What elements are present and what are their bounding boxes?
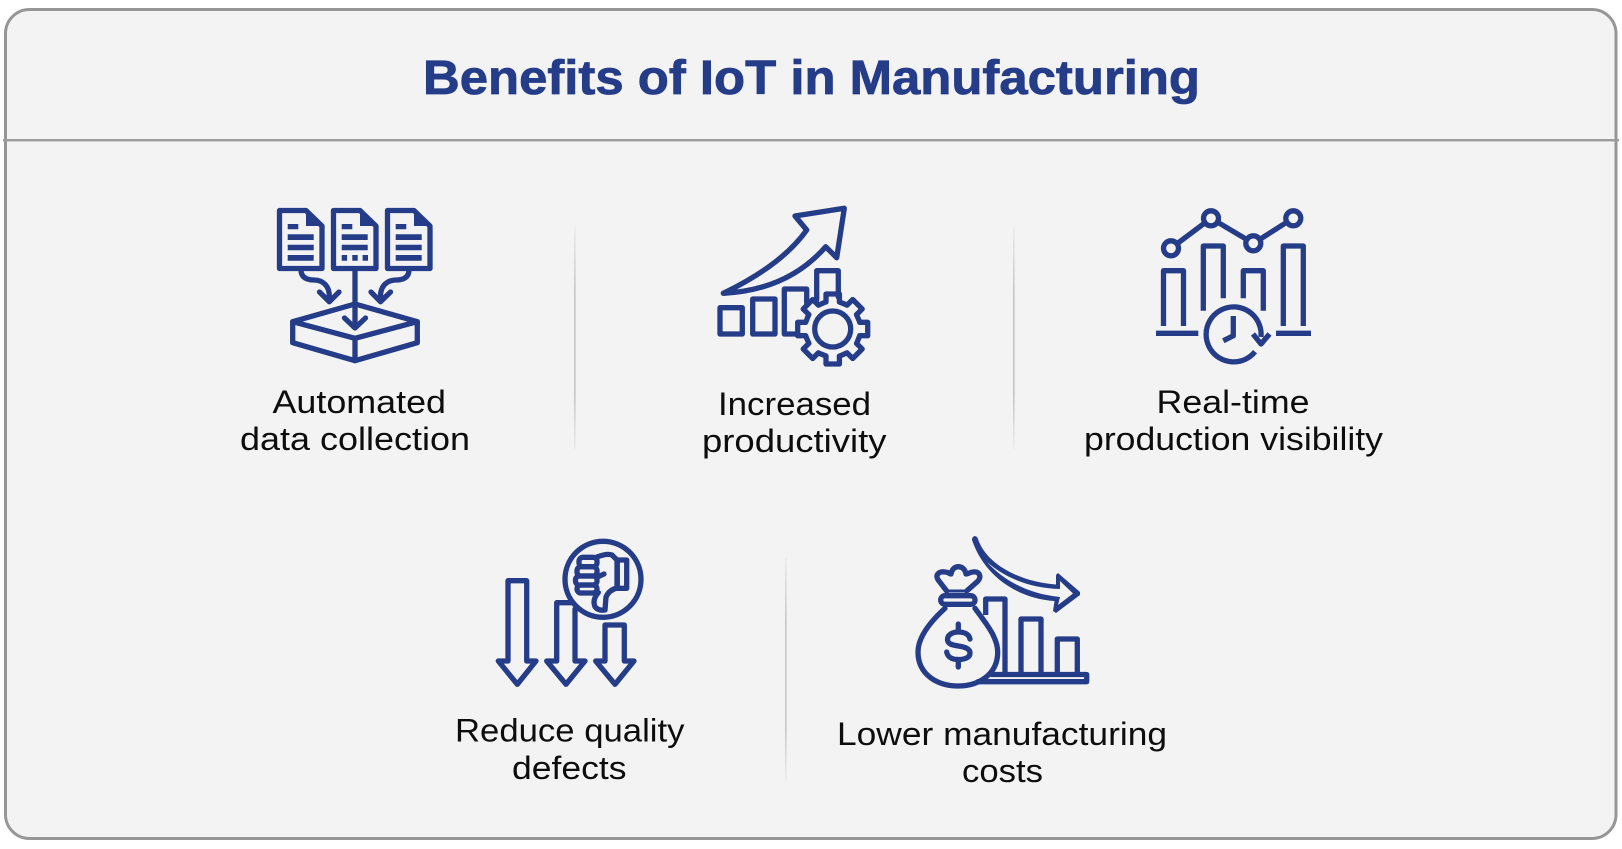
label: increased productivity: [702, 386, 886, 459]
label: lower manufacturing costs: Lower manufacturing: [837, 716, 1167, 752]
label: reduce quality defects: Reduce quality: [455, 713, 684, 749]
label: automated data collection: Automated: [272, 384, 446, 420]
divider: bottom row: [785, 558, 787, 780]
divider: top row left: [574, 227, 576, 449]
icon: money bag with falling chart: [918, 536, 1087, 686]
label: automated data collection: data collection: [240, 421, 470, 457]
label: real-time production visibility: production visibility: [1084, 421, 1383, 457]
divider: top row right: [1013, 227, 1015, 449]
icon: down arrows with thumbs down: [498, 541, 641, 684]
label: automated data collection: [240, 384, 470, 457]
label: lower manufacturing costs: [837, 716, 1167, 789]
header divider: [3, 139, 1619, 141]
label: real-time production visibility: Real-time: [1156, 384, 1310, 420]
label: increased productivity: productivity: [702, 423, 886, 459]
label: reduce quality defects: defects: [512, 750, 626, 786]
icon: real-time chart with clock: [1156, 211, 1311, 362]
label: lower manufacturing costs: costs: [962, 753, 1043, 789]
label: reduce quality defects: [455, 713, 684, 786]
label: real-time production visibility: [1084, 384, 1383, 457]
title: Benefits of IoT in Manufacturing: [423, 51, 1200, 105]
icon: documents flowing into a box: [280, 210, 430, 361]
label: increased productivity: Increased: [718, 386, 871, 422]
icon: growth chart with gear: [720, 208, 868, 364]
